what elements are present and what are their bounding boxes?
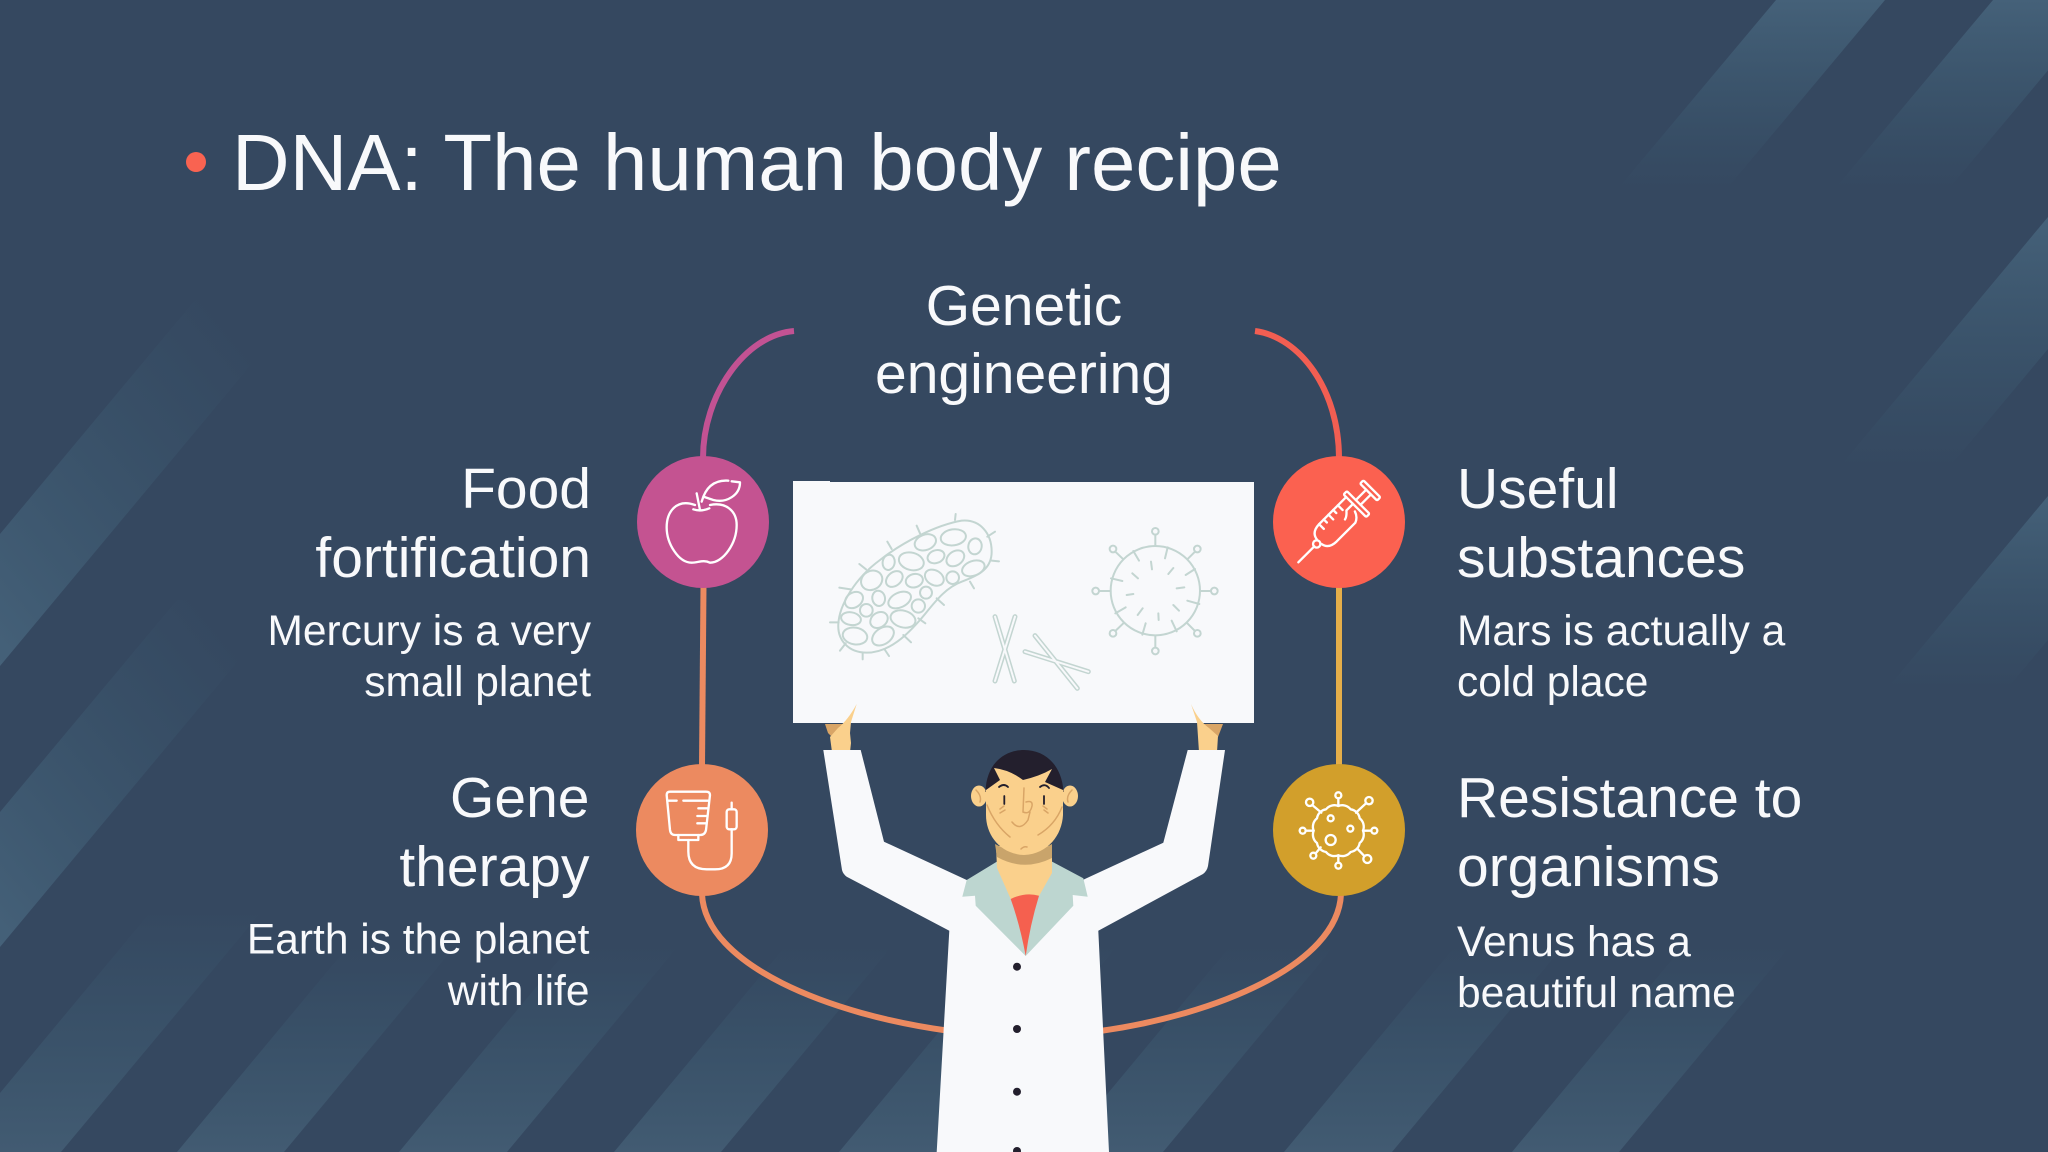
- icon: iv drip bag: [636, 764, 768, 896]
- ears: [971, 786, 1078, 806]
- red shirt: [1011, 894, 1039, 956]
- description: resistance to organisms: Venus has a: [1457, 919, 1691, 966]
- text block: useful substances: [1457, 457, 1786, 706]
- lab coat: [823, 750, 1225, 1152]
- description: useful substances: Mars is actually a: [1457, 608, 1786, 655]
- coat buttons: [1013, 963, 1021, 1152]
- drawing: bacterium: [830, 514, 999, 659]
- heading: food fortification: fortification: [315, 526, 591, 590]
- description: gene therapy: Earth is the planet: [247, 916, 590, 964]
- heading: food fortification: Food: [461, 457, 591, 521]
- coat collar: [962, 862, 1088, 956]
- hands: [825, 704, 1223, 752]
- nose, mouth, ear and face lines: [976, 788, 1072, 849]
- connector: food fortification to gene therapy: [702, 586, 704, 766]
- heading: gene therapy: Gene: [450, 766, 590, 830]
- scientist holding the board: [823, 704, 1225, 1152]
- title: [186, 118, 1282, 207]
- board with microbe drawings: [793, 481, 1254, 723]
- description: useful substances: cold place: [1457, 659, 1648, 706]
- text block: resistance to organisms: [1457, 766, 1802, 1017]
- drawing: virus: [1092, 528, 1218, 654]
- heading: resistance to organisms: Resistance to: [1457, 766, 1802, 830]
- neck: [996, 846, 1052, 899]
- description: resistance to organisms: beautiful name: [1457, 970, 1736, 1017]
- connector: genetic engineering to useful substances: [1255, 331, 1339, 458]
- eyes and eyebrows: [999, 785, 1049, 804]
- heading: gene therapy: therapy: [399, 835, 590, 899]
- text block: gene therapy: [247, 766, 590, 1015]
- icon: syringe: [1273, 456, 1405, 588]
- description: food fortification: small planet: [364, 659, 591, 706]
- title text: DNA: The human body recipe: [232, 118, 1282, 207]
- description: food fortification: Mercury is a very: [267, 608, 592, 655]
- drawing: chromosomes: [995, 617, 1088, 688]
- head: [971, 750, 1078, 855]
- face: [986, 768, 1063, 855]
- connector: useful substances to resistance: [1336, 586, 1342, 766]
- heading: useful substances: Useful: [1457, 457, 1619, 521]
- text block: food fortification: [267, 457, 592, 706]
- neck shadow: [995, 844, 1052, 865]
- icon: virus: [1273, 764, 1405, 896]
- heading: resistance to organisms: organisms: [1457, 835, 1720, 899]
- icon: apple: [637, 456, 769, 588]
- heading: useful substances: substances: [1457, 526, 1745, 590]
- connector: resistance to scientist: [1100, 894, 1341, 1031]
- hair: [986, 750, 1064, 792]
- connector: gene therapy to scientist: [702, 894, 950, 1031]
- connector: genetic engineering to food fortification: [703, 331, 794, 458]
- description: gene therapy: with life: [447, 968, 590, 1015]
- heading: genetic engineering: engineering: [875, 342, 1173, 406]
- title bullet: [186, 152, 206, 172]
- heading: genetic engineering: Genetic: [926, 274, 1122, 338]
